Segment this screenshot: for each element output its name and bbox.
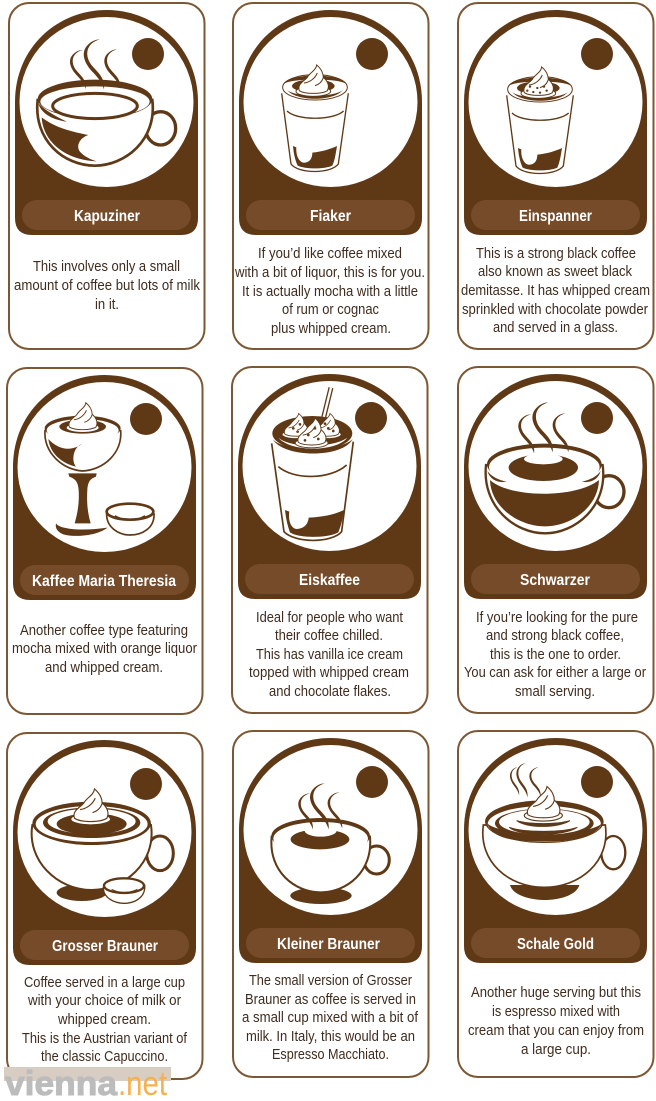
description <box>461 246 650 336</box>
description: a small cup mixed with a bit of <box>242 1010 419 1026</box>
description: This is a strong black coffee <box>476 246 636 262</box>
description: If you’re looking for the pure <box>476 610 638 626</box>
card: Grosser Brauner <box>7 733 202 1079</box>
description: this is the one to order. <box>490 647 621 663</box>
description: Another huge serving but this <box>471 985 641 1001</box>
card frame <box>232 367 428 713</box>
card frame <box>233 731 428 1077</box>
description: their coffee chilled. <box>275 628 383 644</box>
icon: glass with whipped cream <box>282 65 348 171</box>
straw <box>323 388 331 422</box>
description <box>12 623 197 676</box>
description: amount of coffee but lots of milk <box>14 278 201 294</box>
card frame <box>233 3 428 349</box>
name: Schale Gold <box>517 936 594 953</box>
icon: small cup <box>271 783 389 904</box>
card frame <box>9 3 204 349</box>
card: Eiskaffee <box>232 367 428 713</box>
card: Kleiner Brauner <box>233 731 428 1077</box>
card: Kaffee Maria Theresia <box>7 368 202 714</box>
card frame <box>7 368 202 714</box>
logo: vienna.net <box>4 1065 171 1101</box>
description: Brauner as coffee is served in <box>245 992 416 1008</box>
description: small serving. <box>515 684 595 700</box>
name: Einspanner <box>519 208 592 225</box>
description <box>464 610 646 700</box>
card frame <box>7 733 202 1079</box>
name: Grosser Brauner <box>52 938 158 955</box>
icon: black coffee cup <box>486 402 624 533</box>
name: Fiaker <box>310 208 351 225</box>
description: This is the Austrian variant of <box>22 1031 188 1047</box>
card: Schale Gold <box>458 731 654 1077</box>
description: of rum or cognac <box>282 302 379 318</box>
description: Coffee served in a large cup <box>24 975 185 991</box>
description: plus whipped cream. <box>271 321 391 337</box>
icon: cup with milk <box>37 39 176 166</box>
description: The small version of Grosser <box>249 973 412 989</box>
description: mocha mixed with orange liquor <box>12 641 197 657</box>
description <box>468 985 644 1058</box>
description: topped with whipped cream <box>249 665 409 681</box>
icon: large cup with cream <box>483 763 625 900</box>
description: and served in a glass. <box>493 320 618 336</box>
description: and chocolate flakes. <box>269 684 391 700</box>
description: Another coffee type featuring <box>20 623 188 639</box>
description: This involves only a small <box>33 259 180 275</box>
card: Fiaker <box>233 3 428 349</box>
icon: iced coffee glass <box>272 388 353 540</box>
description: whipped cream. <box>57 1012 151 1028</box>
description: It is actually mocha with a little <box>242 284 418 300</box>
card frame <box>458 3 654 349</box>
card: Einspanner <box>458 3 654 349</box>
card: Kapuziner <box>9 3 204 349</box>
description: a large cup. <box>521 1042 591 1058</box>
description: and whipped cream. <box>45 660 163 676</box>
name: Kaffee Maria Theresia <box>32 573 176 590</box>
card frame <box>458 731 654 1077</box>
description: with your choice of milk or <box>27 993 181 1009</box>
description <box>14 259 201 313</box>
description <box>234 246 425 337</box>
description: the classic Capuccino. <box>41 1049 168 1065</box>
description: Espresso Macchiato. <box>272 1047 389 1063</box>
description: Ideal for people who want <box>256 610 403 626</box>
name: Kleiner Brauner <box>277 936 380 953</box>
name: Schwarzer <box>520 572 590 589</box>
card: Schwarzer <box>458 367 654 713</box>
description: with a bit of liquor, this is for you. <box>234 265 425 281</box>
description <box>249 610 409 700</box>
icon: large cup with cream and small jug <box>32 789 173 903</box>
card frame <box>458 367 654 713</box>
description: also known as sweet black <box>478 264 633 280</box>
name: Kapuziner <box>74 208 140 225</box>
description: and strong black coffee, <box>486 628 624 644</box>
description: This has vanilla ice cream <box>256 647 403 663</box>
icon: glass with chocolate powder <box>507 67 573 173</box>
description: in it. <box>95 297 119 313</box>
icon: stemmed glass and small bowl <box>45 403 154 536</box>
description <box>242 973 419 1063</box>
description: If you’d like coffee mixed <box>258 246 402 262</box>
name: Eiskaffee <box>299 572 360 589</box>
description: milk. In Italy, this would be an <box>246 1029 415 1045</box>
description <box>22 975 188 1065</box>
description: is espresso mixed with <box>492 1004 620 1020</box>
